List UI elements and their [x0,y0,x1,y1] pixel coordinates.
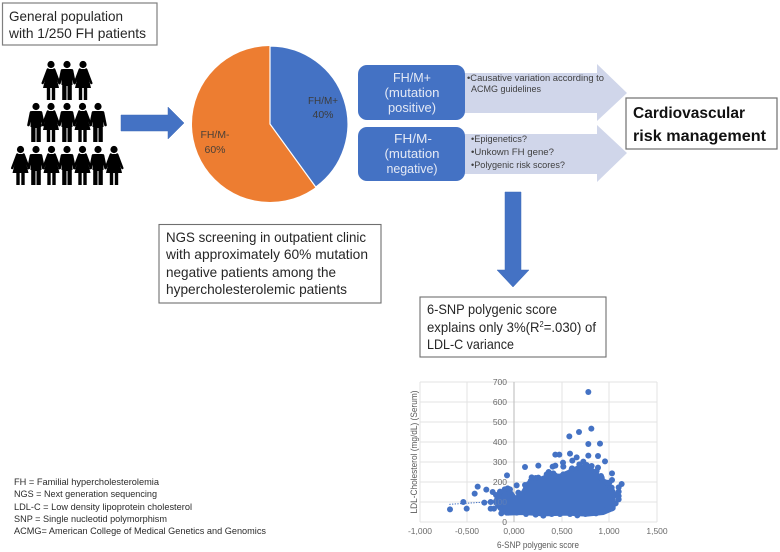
x axis title: 6-SNP polygenic score [497,540,579,550]
legend: abbreviations: ACMG= American College of Medical Genetics and Genomics [14,526,266,537]
text box: general population: General population [9,8,123,24]
arrow: population to pie [121,107,184,139]
text box: NGS screening: with approximately 60% mutation [165,246,368,262]
y axis labels: 200 [493,477,507,487]
text box: general population: with 1/250 FH patients [8,25,146,41]
box: FH/M- mutation negative: negative) [386,161,438,176]
text box: NGS screening: negative patients among the [166,264,336,280]
box: FH/M+ mutation positive: FH/M+ [393,70,431,85]
legend: abbreviations: SNP = Single nucleotid polymorphism [14,514,167,525]
text box: 6-SNP polygenic score: 6-SNP polygenic score [427,301,557,317]
x axis labels: 0,000 [503,526,525,536]
arrow panel: causative variation: •Causative variation according to [467,73,604,84]
x axis labels: -1,000 [408,526,432,536]
box: cardiovascular risk management: Cardiovascular [633,105,745,122]
text box: 6-SNP polygenic score: LDL-C variance [427,336,514,352]
arrow panel: open questions: •Polygenic risk scores? [471,160,565,171]
arrow panel: open questions: •Unkown FH gene? [471,147,554,158]
legend: abbreviations: LDL-C = Low density lipoprotein cholesterol [14,502,192,513]
arrow panel: open questions: •Epigenetics? [471,134,527,145]
box: cardiovascular risk management: risk management [633,128,766,145]
scatter chart: LDL-C vs polygenic score [408,377,668,550]
y axis title: LDL-Cholesterol (mg/dL) (Serum) [409,390,419,514]
box: FH/M- mutation negative [358,127,465,181]
text box: general population [2,3,157,45]
text box: NGS screening [159,224,381,303]
data points [447,389,625,519]
text box: 6-SNP polygenic score: =.030) of [544,319,596,335]
y axis labels: 700 [493,377,507,387]
pie chart: mutation share: FH/M+ [308,95,338,107]
y axis label over points: 100 [493,497,507,507]
pie chart: mutation share: 60% [204,144,226,156]
box: cardiovascular risk management [626,98,777,149]
y axis labels: 400 [493,437,507,447]
pie chart: mutation share: FH/M- [200,129,230,141]
y axis labels: 500 [493,417,507,427]
legend: abbreviations: FH = Familial hypercholesterolemia [14,477,160,488]
text box: 6-SNP polygenic score [420,297,606,357]
y axis labels [493,377,507,527]
text box: NGS screening: NGS screening in outpatient clinic [166,229,366,245]
arrow panel: causative variation [462,64,627,121]
x axis labels [408,526,668,536]
y axis labels: 0 [502,517,507,527]
x axis labels: 1,500 [646,526,668,536]
box: FH/M- mutation negative: FH/M- [394,131,432,146]
box: FH/M- mutation negative: (mutation [384,146,440,161]
x axis labels: 0,500 [551,526,573,536]
icon: pyramid of people [12,61,122,185]
pie chart: mutation share: 40% [312,109,334,121]
y axis labels: 300 [493,457,507,467]
text box: NGS screening: hypercholesterolemic patients [166,281,347,297]
legend: abbreviations: NGS = Next generation sequencing [14,489,157,500]
text box: 6-SNP polygenic score: explains only 3%(R [427,319,547,335]
box: FH/M+ mutation positive: (mutation [384,85,440,100]
pie chart: mutation share [192,46,348,202]
y axis labels: 600 [493,397,507,407]
arrow panel: open questions [462,125,627,182]
box: FH/M+ mutation positive: positive) [388,100,436,115]
x axis labels: -0,500 [455,526,479,536]
box: FH/M+ mutation positive [358,65,465,120]
text box: 6-SNP polygenic score: 2 [540,320,544,329]
legend: abbreviations [14,477,266,537]
arrow panel: causative variation: ACMG guidelines [471,84,541,95]
arrow: down to polygenic score [497,192,529,287]
x axis labels: 1,000 [598,526,620,536]
